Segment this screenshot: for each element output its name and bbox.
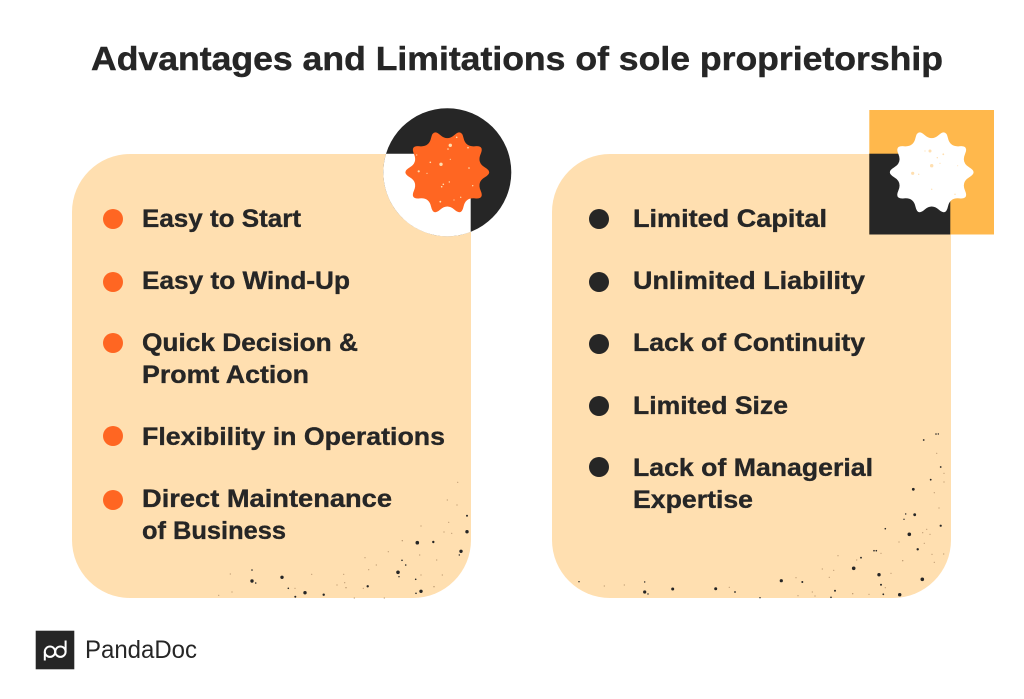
- list item: Lack of Managerial Expertise: Lack of Managerial: [633, 454, 873, 482]
- list item: Limited Size: Limited Size: [633, 392, 788, 420]
- list item: Direct Maintenance of Business: of Business: [142, 517, 286, 545]
- list item: Limited Capital: Limited Capital: [633, 205, 827, 233]
- icon: amber and dark square with white badge: [869, 110, 994, 234]
- icon: PandaDoc mark: [36, 631, 74, 669]
- panel background: [552, 154, 951, 598]
- panel: limitations: [552, 110, 994, 598]
- list item: Easy to Start: Easy to Start: [142, 205, 302, 233]
- list item: Lack of Continuity: Lack of Continuity: [633, 329, 865, 357]
- speckle texture: [218, 482, 469, 599]
- speckle texture: [578, 433, 945, 598]
- list item: Lack of Managerial Expertise: [589, 454, 873, 514]
- wordmark: PandaDoc: [85, 636, 197, 664]
- list item: Easy to Wind-Up: Easy to Wind-Up: [142, 267, 350, 295]
- list item: Quick Decision & Promt Action: [103, 329, 358, 389]
- list item: Unlimited Liability: Unlimited Liability: [633, 267, 865, 295]
- list item: Lack of Managerial Expertise: Expertise: [633, 486, 753, 514]
- list item: Flexibility in Operations: Flexibility in Operations: [142, 423, 445, 451]
- logo: PandaDoc: [36, 631, 197, 669]
- list item: Direct Maintenance of Business: Direct Maintenance: [142, 485, 392, 513]
- title: Advantages and Limitations of sole proprietorship: [91, 41, 943, 78]
- list item: Direct Maintenance of Business: [103, 485, 392, 545]
- list item: Quick Decision & Promt Action: Quick Decision &: [142, 329, 358, 357]
- panel background: [72, 154, 471, 598]
- icon: dark and white circle with orange badge: [383, 108, 511, 236]
- panel: advantages: [72, 108, 511, 599]
- list item: Quick Decision & Promt Action: Promt Action: [142, 361, 309, 389]
